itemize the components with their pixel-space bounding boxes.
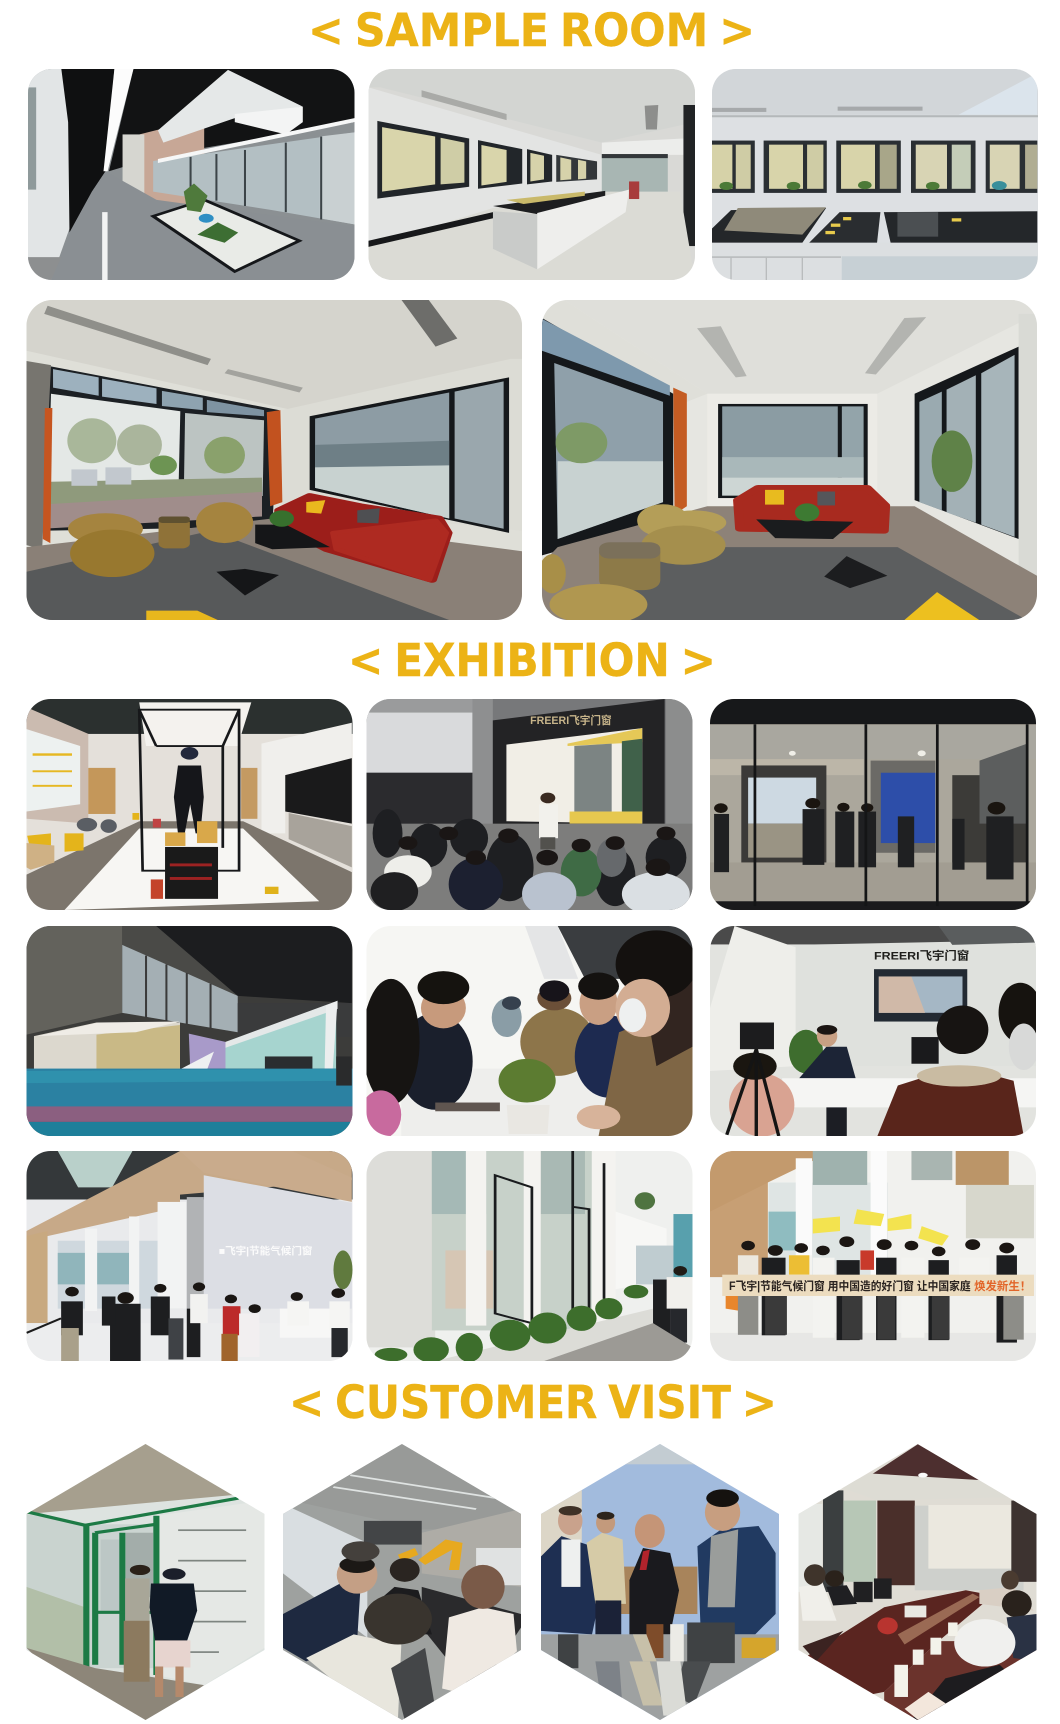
photo: lounge with red sofa, left view bbox=[26, 300, 522, 620]
photo: booth with glass display case bbox=[26, 699, 352, 910]
hexagon photo: factory visit with yellow robot bbox=[283, 1444, 521, 1720]
heading: sample room: < SAMPLE ROOM > bbox=[308, 4, 755, 57]
banner bbox=[722, 1275, 1034, 1296]
hexagon photo: clients at green-framed window bbox=[26, 1444, 264, 1720]
photo: live interview in white booth bbox=[710, 926, 1042, 1136]
heading: customer visit: < CUSTOMER VISIT > bbox=[289, 1376, 777, 1429]
photo: white booth with OSB roof and crowd bbox=[26, 1151, 352, 1361]
photo: window models on counter bbox=[712, 69, 1038, 280]
panel: exhibition bbox=[26, 634, 1042, 1362]
photo: glass corridor bbox=[28, 69, 354, 280]
panel: sample room bbox=[26, 4, 1038, 625]
logo text on screen: FREERI飞宇门窗 bbox=[530, 714, 612, 727]
photo: speaker presenting to seated audience bbox=[366, 699, 692, 916]
panel: customer visit bbox=[26, 1376, 1036, 1720]
photo: window display hall bbox=[368, 69, 695, 280]
photo: lounge with red sofa, right view bbox=[539, 300, 1037, 625]
photo: exhibition hall with booth bbox=[26, 926, 352, 1136]
photo: store front glass doors with visitors bbox=[710, 699, 1036, 910]
wall logo: ■飞宇|节能气候门窗 bbox=[219, 1244, 312, 1257]
heading: exhibition: < EXHIBITION > bbox=[348, 634, 716, 687]
hexagon photo: executives reviewing aluminum profiles bbox=[541, 1444, 779, 1720]
photo: tall glass doors and planters bbox=[366, 1151, 692, 1362]
photo: group with banner at booth bbox=[710, 1151, 1036, 1361]
logo on booth wall: FREERI飞宇门窗 bbox=[874, 949, 969, 962]
hexagon photo: conference room meeting bbox=[798, 1444, 1036, 1720]
photo: meeting around a table bbox=[360, 926, 697, 1139]
